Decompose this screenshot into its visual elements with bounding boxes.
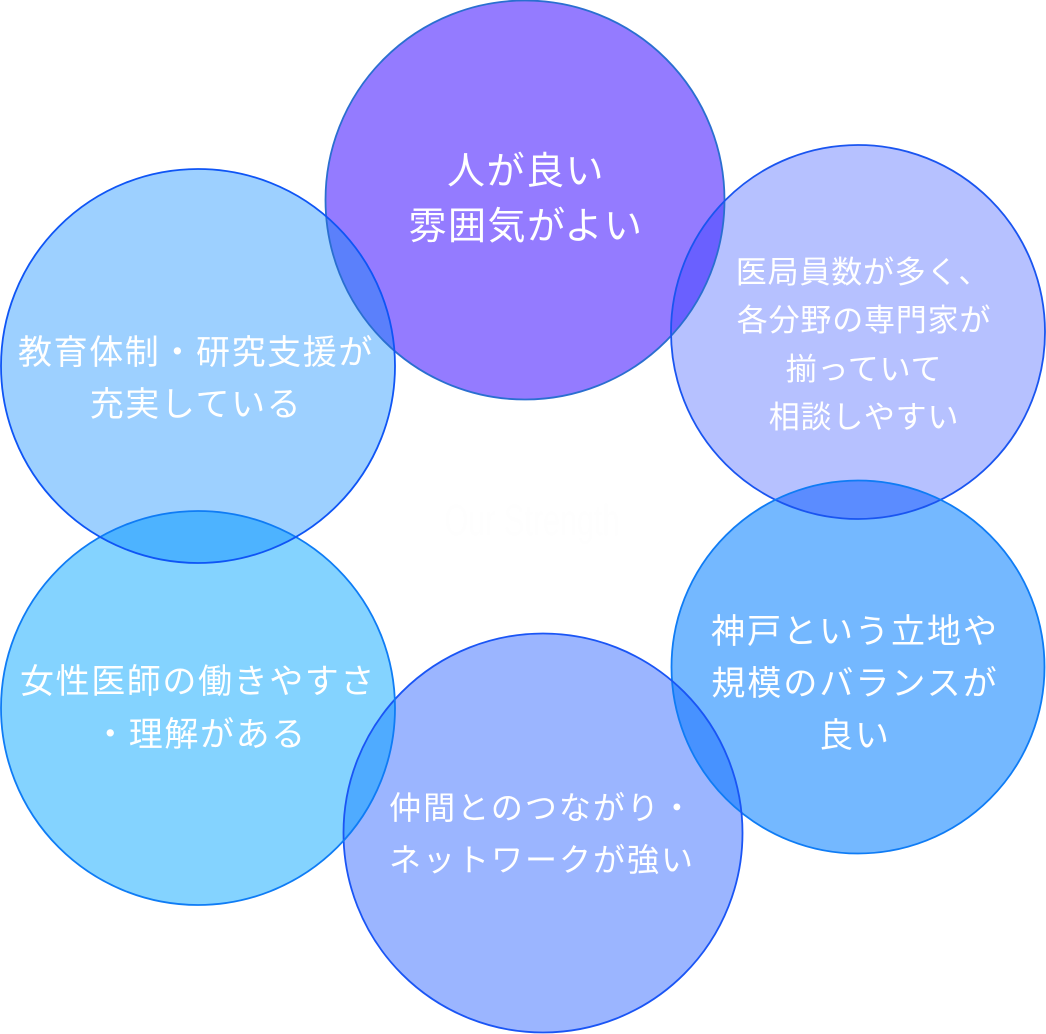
overlap: lower right and bottom bbox=[673, 683, 740, 810]
label: bottom circle: 仲間とのつながり・ bbox=[389, 790, 695, 826]
center heading: Our Strength bbox=[444, 496, 620, 545]
overlap: top and upper right bbox=[672, 204, 724, 334]
circle: lower left bbox=[1, 511, 395, 905]
circle: bottom bbox=[344, 634, 742, 1032]
label: upper right circle: 各分野の専門家が bbox=[737, 303, 991, 338]
circle: top bbox=[326, 0, 724, 400]
label: upper right circle: 揃っていて bbox=[786, 352, 942, 387]
label: upper right circle: 相談しやすい bbox=[769, 400, 959, 435]
circle: upper left bbox=[1, 169, 395, 563]
label: upper left circle bbox=[18, 334, 374, 424]
overlap: bottom and lower left bbox=[344, 702, 394, 838]
label: lower right circle: 良い bbox=[819, 717, 891, 755]
circle: upper right bbox=[671, 145, 1045, 519]
label: upper right circle bbox=[736, 255, 991, 435]
label: lower right circle: 神戸という立地や bbox=[711, 613, 999, 651]
label: top circle: 人が良い bbox=[447, 151, 605, 193]
label: upper left circle: 充実している bbox=[90, 386, 302, 424]
label: lower left circle: ・理解がある bbox=[93, 716, 307, 754]
circle: lower right bbox=[672, 480, 1044, 854]
label: upper left circle: 教育体制・研究支援が bbox=[18, 334, 374, 372]
label: bottom circle bbox=[389, 790, 695, 878]
label: lower left circle: 女性医師の働きやすさ bbox=[20, 663, 376, 701]
label: lower right circle: 規模のバランスが bbox=[711, 665, 999, 703]
overlap: lower left and upper left bbox=[102, 512, 294, 562]
overlap: top and upper left bbox=[327, 218, 394, 348]
overlap: upper right and lower right bbox=[778, 481, 938, 518]
label: top circle bbox=[408, 151, 644, 248]
label: upper right circle: 医局員数が多く、 bbox=[736, 255, 990, 290]
label: bottom circle: ネットワークが強い bbox=[389, 842, 695, 878]
label: lower left circle bbox=[20, 663, 376, 754]
label: top circle: 雰囲気がよい bbox=[408, 206, 644, 248]
label: lower right circle bbox=[711, 613, 999, 755]
